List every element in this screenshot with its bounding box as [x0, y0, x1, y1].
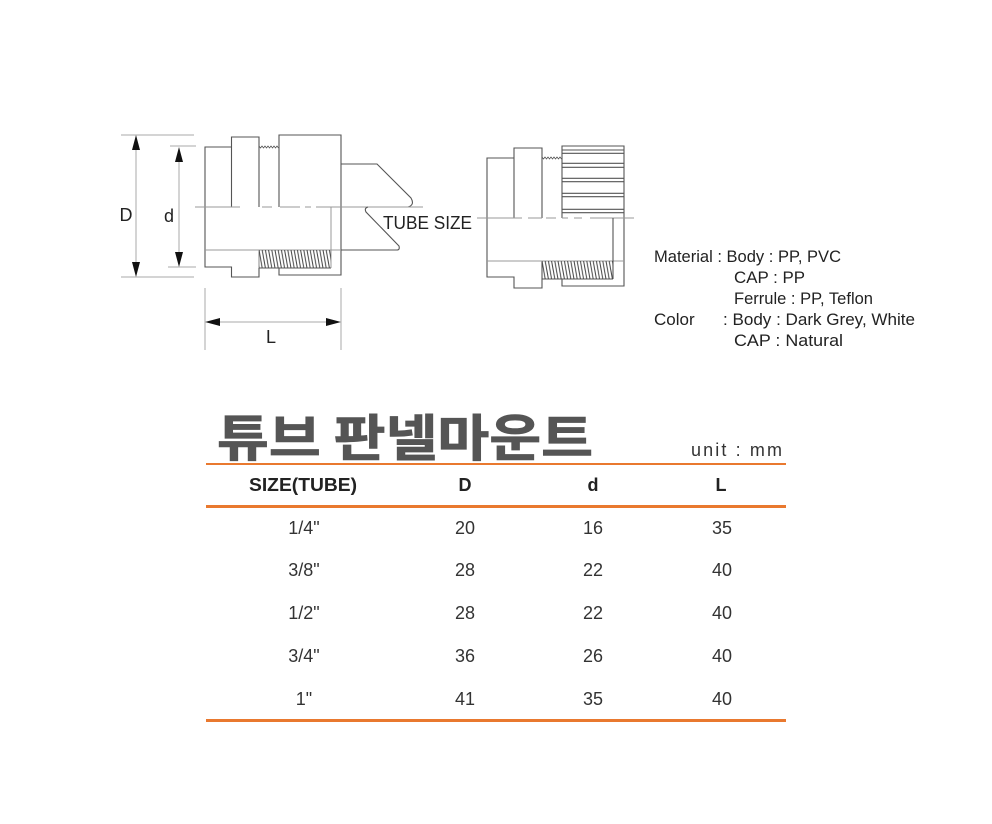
row 1: 41 [455, 689, 475, 709]
row 1/2: 40 [712, 603, 732, 623]
material and colour specification: : Body : Dark Grey, White [723, 310, 915, 329]
material and colour specification: Material : Body : PP, PVC [654, 247, 841, 266]
row 3/8: 40 [712, 560, 732, 580]
material and colour specification [654, 247, 915, 350]
row 1/2: 22 [583, 603, 603, 623]
tube break [331, 164, 423, 250]
row 3/8: 3/8" [288, 560, 320, 580]
label: tube size: TUBE SIZE [383, 213, 472, 233]
dimension D [120, 135, 194, 277]
row 1/4: 1/4" [288, 518, 320, 538]
material and colour specification: CAP : Natural [734, 331, 843, 350]
left drawing: fitting cross-section [120, 135, 423, 350]
row 1 [296, 689, 732, 709]
row 3/8 [288, 560, 732, 580]
row 3/4: 3/4" [288, 646, 320, 666]
dimension d [164, 146, 196, 267]
knurled cap lines [562, 150, 624, 213]
title: 튜브 판넬마운트 [217, 399, 593, 471]
dimension L: L [266, 327, 276, 347]
row 1: 35 [583, 689, 603, 709]
row 1/4: 35 [712, 518, 732, 538]
row 3/8: 22 [583, 560, 603, 580]
row 1/2 [288, 603, 732, 623]
row 1: 40 [712, 689, 732, 709]
dimension L [205, 288, 341, 350]
table header: L [716, 475, 726, 495]
dimension d: d [164, 206, 174, 226]
row 3/4: 36 [455, 646, 475, 666]
material and colour specification: CAP : PP [734, 268, 805, 287]
right drawing: fitting with knurled cap [477, 146, 634, 288]
table rule bottom [206, 719, 786, 722]
row 1/4 [288, 518, 732, 538]
dimension D: D [120, 205, 132, 225]
material and colour specification: Color [654, 310, 695, 329]
row 1/4: 20 [455, 518, 475, 538]
row 3/4: 26 [583, 646, 603, 666]
row 1/4: 16 [583, 518, 603, 538]
table rule header [206, 505, 786, 508]
table header: SIZE(TUBE) [249, 475, 357, 495]
row 1: 1" [296, 689, 312, 709]
row 3/4 [288, 646, 732, 666]
specification table [206, 463, 786, 722]
fitting body [195, 135, 360, 277]
fitting body [477, 146, 634, 288]
table header: d [588, 475, 598, 495]
table rule top [206, 463, 786, 465]
row 1/2: 28 [455, 603, 475, 623]
table header [249, 475, 726, 495]
table header: D [458, 475, 472, 495]
row 3/4: 40 [712, 646, 732, 666]
row 1/2: 1/2" [288, 603, 320, 623]
material and colour specification: Ferrule : PP, Teflon [734, 289, 873, 308]
unit note: unit : mm [691, 440, 782, 460]
row 3/8: 28 [455, 560, 475, 580]
